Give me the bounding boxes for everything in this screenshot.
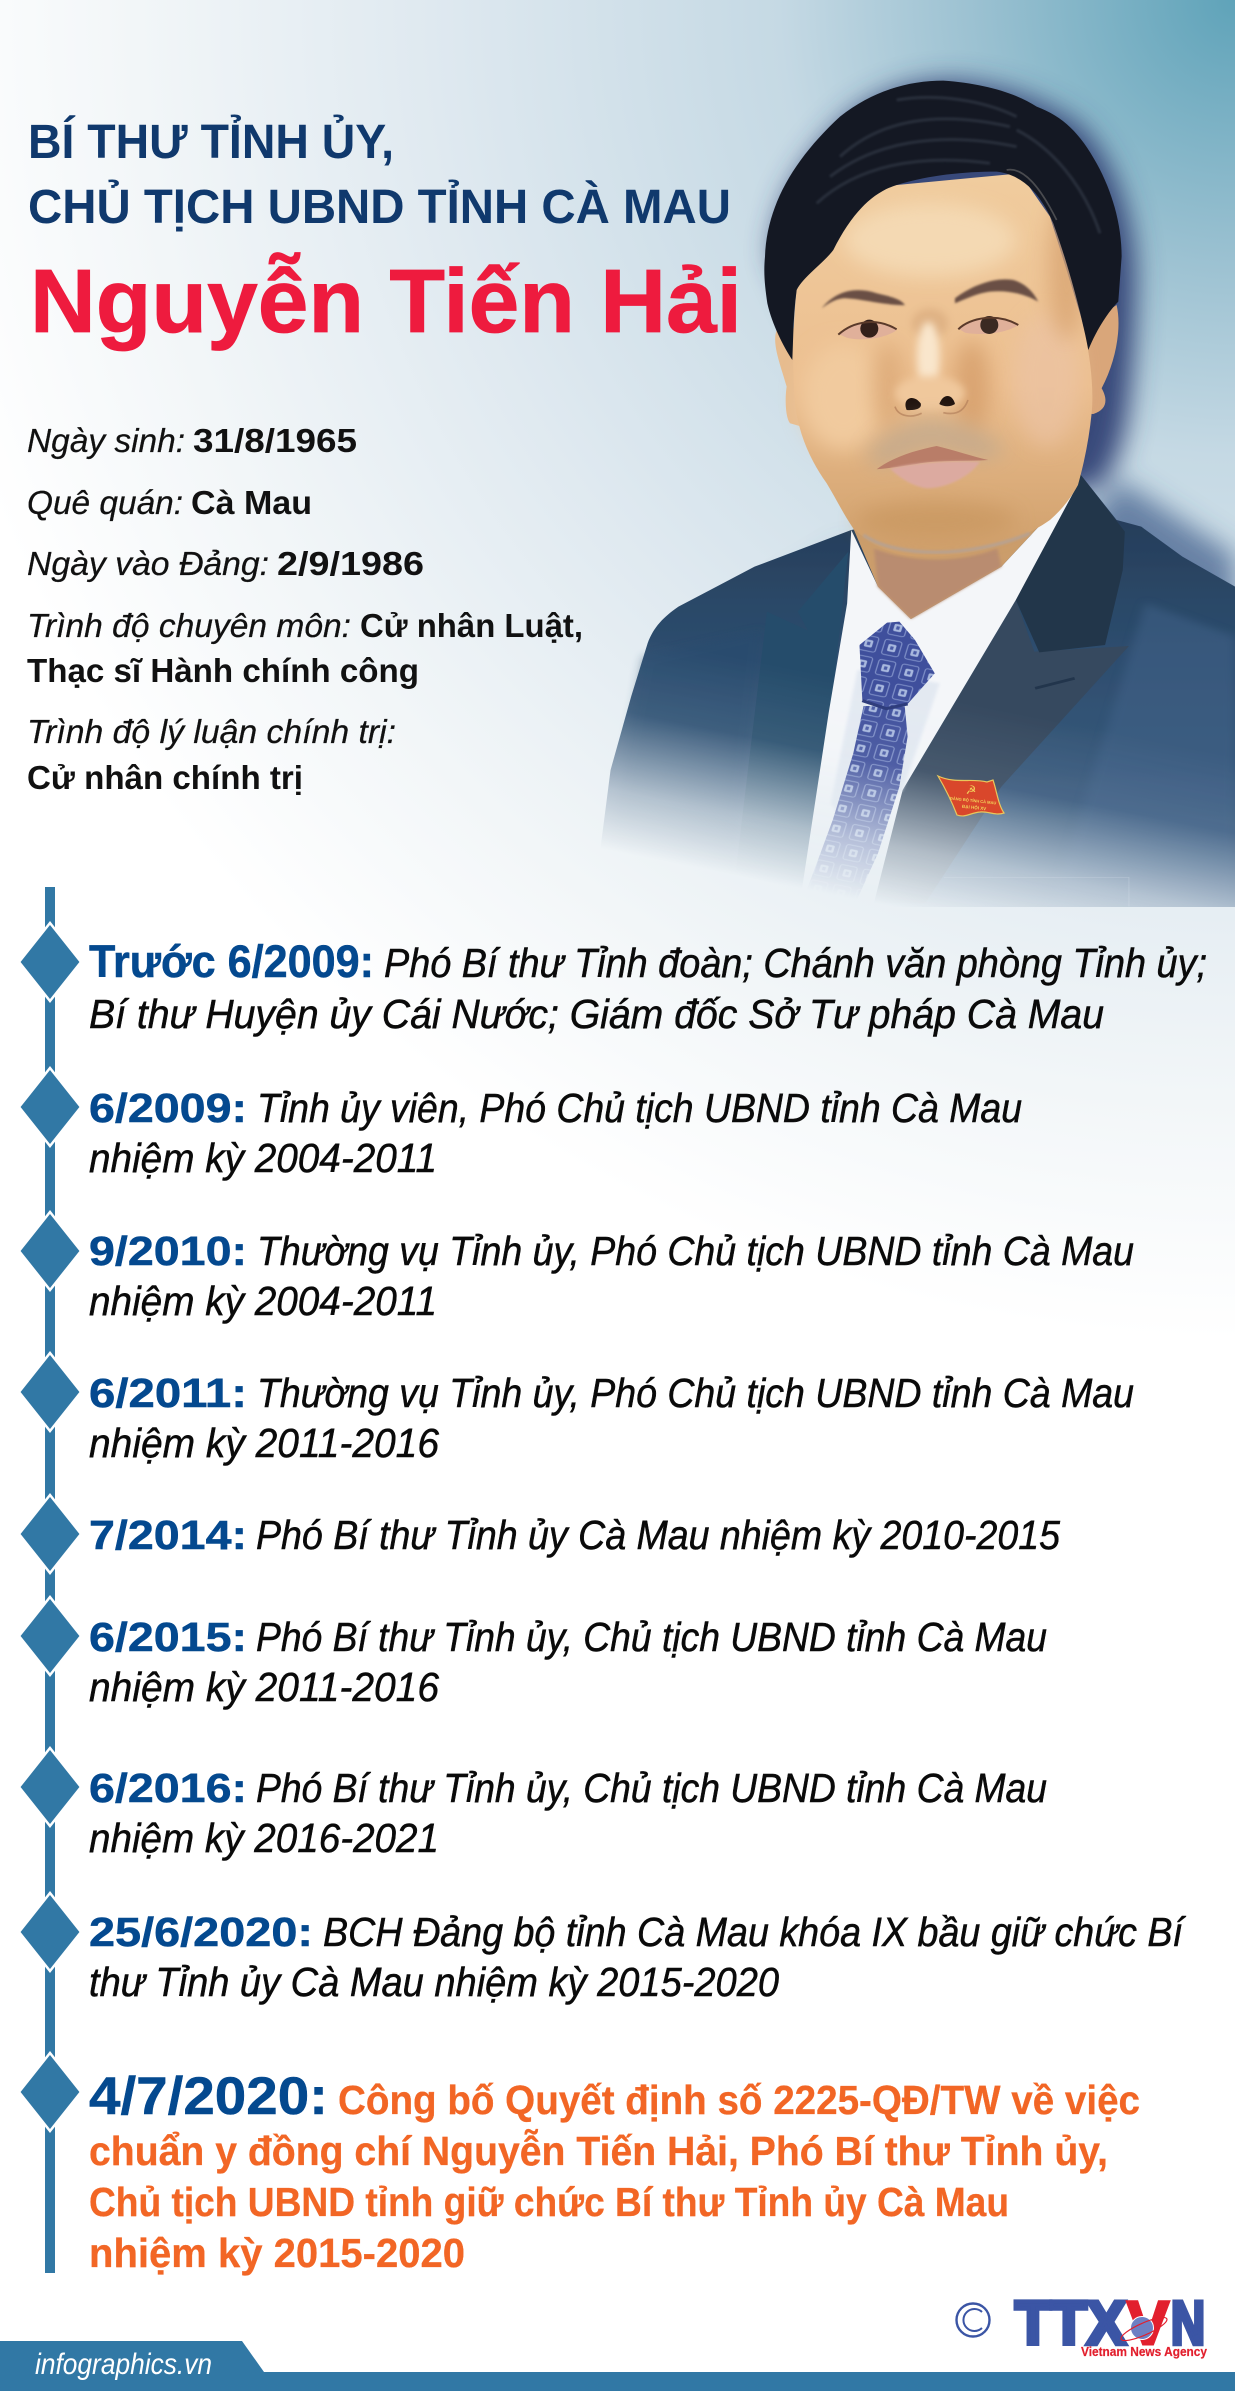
entry: 4/7/2020 highlighted: Công bố Quyết định số 2225-QĐ/TW về việc	[338, 2077, 1140, 2123]
neck	[853, 528, 1038, 619]
suit jacket	[602, 475, 1235, 907]
left jacket shading	[626, 651, 645, 713]
dark halo behind portrait	[690, 81, 1235, 640]
entry: 6/2009: Tỉnh ủy viên, Phó Chủ tịch UBND tỉnh Cà Mau	[257, 1085, 1022, 1131]
entry: 25/6/2020: thư Tỉnh ủy Cà Mau nhiệm kỳ 2015-2020	[89, 1959, 779, 2005]
entry: 6/2011: nhiệm kỳ 2011-2016	[89, 1420, 439, 1466]
diamond markers	[19, 923, 81, 2131]
entry: 6/2009: nhiệm kỳ 2004-2011	[89, 1135, 437, 1181]
entry: 25/6/2020: 25/6/2020:	[89, 1909, 313, 1955]
N letter: N	[1171, 2289, 1205, 2357]
entry: 6/2015: 6/2015:	[89, 1614, 247, 1660]
entry: 6/2011	[89, 1370, 1134, 1466]
entry: 6/2011: 6/2011:	[89, 1370, 247, 1416]
entry: 9/2010: nhiệm kỳ 2004-2011	[89, 1278, 437, 1324]
entry: 4/7/2020 highlighted: chuẩn y đồng chí Nguyễn Tiến Hải, Phó Bí thư Tỉnh ủy,	[89, 2128, 1108, 2174]
party pin: ĐẢNG BỘ TỈNH CÀ MAU	[950, 796, 997, 805]
pocket	[944, 877, 1129, 907]
personal information: Ngày vào Đảng:	[27, 545, 269, 582]
head	[764, 81, 1122, 557]
timeline axis	[45, 887, 55, 2273]
entry: 7/2014: 7/2014:	[89, 1512, 247, 1558]
entry: 6/2009: 6/2009:	[89, 1085, 247, 1131]
tie	[810, 622, 935, 890]
personal information: Cử nhân chính trị	[27, 759, 303, 796]
right upper lapel	[1016, 473, 1125, 652]
lapel buttonhole	[1035, 678, 1075, 688]
personal information: 2/9/1986	[277, 545, 424, 582]
jacket and shirt	[602, 474, 1235, 907]
globe	[1119, 2313, 1169, 2345]
entry: 4/7/2020 highlighted: 4/7/2020:	[89, 2067, 328, 2126]
lips	[877, 446, 988, 488]
face shading	[802, 193, 1085, 538]
personal information: Ngày sinh:	[27, 422, 185, 459]
personal information: Trình độ chuyên môn:	[27, 607, 351, 644]
right ear	[1077, 305, 1119, 414]
V letter: V	[1127, 2289, 1169, 2357]
jaw line	[863, 533, 1030, 552]
entry: before 6/2009: Trước 6/2009:	[89, 936, 374, 987]
TTX letters: TTX	[1015, 2289, 1126, 2357]
entry: 6/2011: Thường vụ Tỉnh ủy, Phó Chủ tịch UBND tỉnh Cà Mau	[257, 1370, 1134, 1416]
footer site name: infographics.vn	[35, 2348, 212, 2381]
title	[28, 114, 742, 352]
eyebrows	[822, 279, 1038, 308]
portrait photo	[598, 81, 1235, 970]
left ear	[775, 327, 810, 427]
right lower lapel	[886, 600, 1128, 870]
personal information: Cử nhân Luật,	[360, 607, 583, 644]
face	[793, 173, 1092, 557]
entry: 6/2009	[89, 1085, 1022, 1181]
entry: before 6/2009: Bí thư Huyện ủy Cái Nước; Giám đốc Sở Tư pháp Cà Mau	[89, 991, 1104, 1037]
entry: 6/2015: Phó Bí thư Tỉnh ủy, Chủ tịch UBND tỉnh Cà Mau	[256, 1614, 1047, 1660]
entry: 4/7/2020 highlighted	[89, 2067, 1140, 2276]
entry: 9/2010	[89, 1228, 1134, 1324]
personal information: Cà Mau	[191, 484, 312, 521]
entry: 6/2015	[89, 1614, 1047, 1710]
personal information	[27, 422, 583, 796]
hair	[764, 81, 1122, 360]
moustache stubble	[867, 418, 1007, 468]
entry: 9/2010: Thường vụ Tỉnh ủy, Phó Chủ tịch UBND tỉnh Cà Mau	[257, 1228, 1134, 1274]
entry: 6/2016	[89, 1765, 1047, 1861]
shirt	[800, 485, 1078, 903]
footer band	[0, 2341, 1235, 2391]
entry: 25/6/2020: BCH Đảng bộ tỉnh Cà Mau khóa IX bầu giữ chức Bí	[323, 1909, 1186, 1955]
eyes	[838, 316, 1018, 339]
personal information: Thạc sĩ Hành chính công	[27, 652, 419, 689]
entry: before 6/2009	[89, 936, 1207, 1037]
entry: 9/2010: 9/2010:	[89, 1228, 247, 1274]
title: BÍ THƯ TỈNH ỦY,	[28, 114, 394, 169]
party pin: ☭	[966, 783, 976, 797]
entry: 25/6/2020	[89, 1909, 1186, 2005]
name: Nguyễn Tiến Hải	[30, 251, 742, 352]
personal information: Trình độ lý luận chính trị:	[27, 713, 396, 750]
entry: 6/2015: nhiệm kỳ 2011-2016	[89, 1664, 439, 1710]
entry: 6/2016: 6/2016:	[89, 1765, 247, 1811]
party pin: ĐẠI HỘI XV	[962, 802, 987, 811]
personal information: 31/8/1965	[193, 422, 357, 459]
timeline	[19, 887, 1207, 2276]
entry: 4/7/2020 highlighted: nhiệm kỳ 2015-2020	[89, 2230, 465, 2276]
TTXVN logo	[956, 2289, 1208, 2359]
personal information: Quê quán:	[27, 484, 183, 521]
party pin	[938, 776, 1004, 816]
title: CHỦ TỊCH UBND TỈNH CÀ MAU	[28, 179, 731, 234]
nose	[895, 322, 968, 416]
shirt shade	[833, 670, 939, 805]
entry: 7/2014: Phó Bí thư Tỉnh ủy Cà Mau nhiệm kỳ 2010-2015	[256, 1512, 1060, 1558]
entry: 4/7/2020 highlighted: Chủ tịch UBND tỉnh giữ chức Bí thư Tỉnh ủy Cà Mau	[89, 2179, 1009, 2225]
agency name: Vietnam News Agency	[1081, 2344, 1208, 2359]
entry: 6/2016: nhiệm kỳ 2016-2021	[89, 1815, 439, 1861]
entry: 6/2016: Phó Bí thư Tỉnh ủy, Chủ tịch UBND tỉnh Cà Mau	[256, 1765, 1047, 1811]
copyright icon	[956, 2304, 990, 2336]
left lapel	[746, 552, 848, 821]
